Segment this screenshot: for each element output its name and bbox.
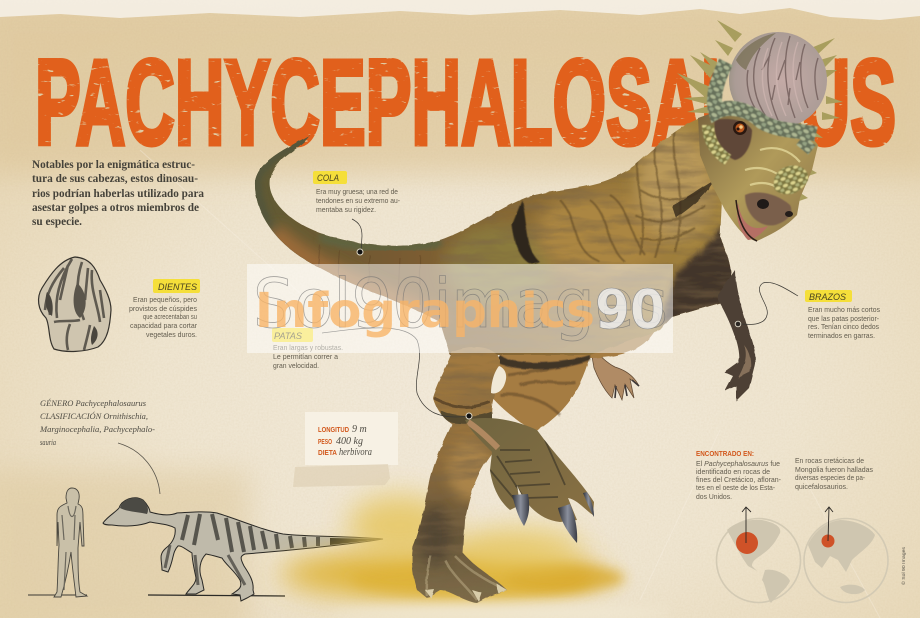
label: cola: tendones en su extremo au-: [316, 196, 400, 205]
watermark: 90: [595, 278, 665, 341]
label: dientes: DIENTES: [158, 282, 197, 292]
label: brazos: que las patas posterior-: [808, 314, 879, 323]
intro text: rios podrían haberlas utilizado para: [32, 186, 204, 200]
label: cola: [313, 171, 400, 255]
tail and body: [254, 119, 732, 356]
label: patas: gran velocidad.: [273, 361, 319, 370]
human scale figure: [28, 488, 87, 597]
globe: north america: [716, 507, 800, 603]
label: patas: PATAS: [274, 331, 302, 341]
globe: asia: [804, 507, 888, 602]
label: dientes: provistos de cúspides: [129, 304, 197, 313]
classification note: GÉNERO Pachycephalosaurus: [40, 398, 147, 408]
data card: size, weight, diet: [293, 412, 398, 487]
classification note: sauria: [40, 437, 56, 447]
panel: encontrado en text: fines del Cretácico, afloran-: [696, 475, 781, 484]
near arm: [718, 270, 755, 401]
label: brazos: BRAZOS: [809, 292, 846, 302]
label: dientes: capacidad para cortar: [130, 321, 197, 330]
intro text: Notables por la enigmática estruc-: [32, 157, 195, 171]
label: dientes: [129, 279, 200, 339]
intro text: tura de sus cabezas, estos dinosau-: [32, 171, 198, 185]
label: cola: mentaba su rigidez.: [316, 205, 376, 214]
classification note: [39, 398, 160, 494]
data card: size, weight, diet: herbívora: [339, 447, 372, 458]
classification note: Marginocephalia, Pachycephalo-: [39, 424, 155, 434]
watermark: Infographics: [255, 283, 595, 339]
data card: size, weight, diet: 9 m: [352, 424, 367, 435]
label: cola: COLA: [317, 173, 339, 183]
panel: encontrado en text: quicefalosaurios.: [795, 482, 848, 491]
far arm: [590, 345, 639, 400]
label: patas: Eran largas y robustas.: [273, 343, 343, 352]
head spines: [677, 20, 843, 202]
data card: size, weight, diet: DIETA: [318, 448, 337, 457]
label: dientes: vegetales duros.: [146, 330, 197, 339]
intro text: [32, 157, 204, 228]
small dinosaur sketch: [103, 498, 383, 601]
label: patas: Le permitían correr a: [273, 352, 339, 361]
data card: size, weight, diet: LONGITUD: [318, 425, 349, 434]
label: patas: [272, 328, 472, 419]
rear foot and claws: [465, 418, 594, 543]
intro text: su especie.: [32, 214, 82, 228]
front leg: [412, 347, 507, 603]
label: brazos: terminados en garras.: [808, 331, 875, 340]
credit: © Sol 90 Images: [900, 546, 907, 585]
skull dome: [729, 32, 827, 128]
classification note: CLASIFICACIÓN Ornithischia,: [40, 411, 148, 421]
label: brazos: [735, 282, 880, 340]
panel: encontrado en text: tes en el oeste de los Esta-: [696, 483, 775, 492]
panel: encontrado en text: diversas especies de pa-: [795, 473, 865, 482]
back thigh: [490, 320, 660, 432]
panel: encontrado en text: identificado en rocas de: [696, 467, 770, 476]
panel: encontrado en text: [696, 451, 873, 501]
data card: size, weight, diet: 400 kg: [336, 436, 363, 447]
data card: size, weight, diet: PESO: [318, 437, 332, 446]
panel: encontrado en text: ENCONTRADO EN:: [696, 451, 754, 458]
gap between the legs: [491, 366, 506, 393]
scale band: [708, 62, 816, 160]
panel: encontrado en text: El Pachycephalosaurus fue: [696, 459, 780, 468]
icon: fossil tooth: [39, 257, 111, 351]
dinosaur illustration: [250, 20, 843, 610]
panel: encontrado en text: En rocas cretácicas de: [795, 456, 864, 465]
intro text: asestar golpes a otros miembros de: [32, 200, 200, 214]
label: brazos: res. Tenían cinco dedos: [808, 322, 879, 331]
head and snout: [698, 105, 818, 241]
label: brazos: Eran mucho más cortos: [808, 305, 880, 314]
watermark: Sol90images: [253, 265, 668, 344]
panel: encontrado en text: dos Unidos.: [696, 492, 732, 501]
panel: encontrado en text: Mongolia fueron halladas: [795, 465, 873, 474]
dust cloud: [280, 495, 670, 618]
label: cola: Era muy gruesa; una red de: [316, 187, 398, 196]
label: dientes: que acrecentaban su: [143, 312, 197, 321]
label: dientes: Eran pequeños, pero: [133, 295, 197, 304]
